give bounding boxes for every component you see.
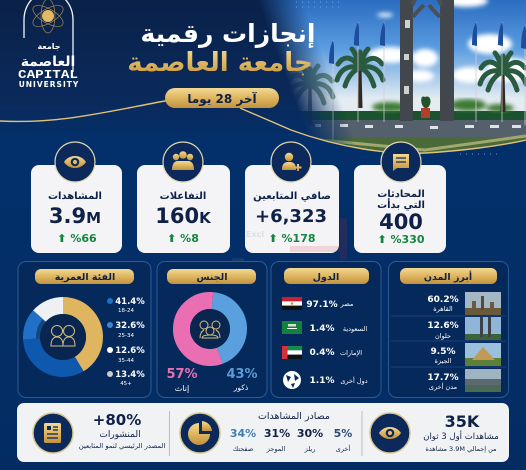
stat: posts: المصدر الرئيسي لنمو المتابعين — [79, 442, 165, 450]
row: Helwan: حلوان — [435, 332, 451, 340]
watermark: Excl — [246, 230, 264, 239]
stat card: views: المشاهدات — [48, 191, 102, 202]
icon: audience — [51, 326, 75, 346]
logo: Capital University: العاصمة — [21, 54, 75, 70]
row: UAE: 0.4% — [310, 348, 334, 358]
stat: view sources: أخرى — [336, 444, 350, 453]
row: other cities: 17.7% — [427, 373, 459, 383]
row: Helwan: 12.6% — [427, 321, 459, 331]
stat: posts: المنشورات — [99, 430, 141, 440]
title: جامعة العاصمة — [127, 48, 313, 78]
row: Giza: 9.5% — [431, 347, 455, 357]
stat card: interactions: ⬆ %8 — [167, 232, 199, 245]
legend: age groups: 25-34 — [118, 333, 134, 339]
logo: Capital University: CAPITAL — [18, 68, 78, 82]
stat: view sources: صفحتك — [233, 445, 254, 453]
legend: age groups: 32.6% — [115, 321, 145, 331]
row: other countries — [283, 371, 368, 389]
row: Giza — [431, 343, 501, 366]
legend: age groups: 18-24 — [118, 308, 134, 314]
heading: age groups: الفئة العمرية — [55, 272, 115, 283]
panel: gender: إناث — [175, 384, 189, 394]
legend: age groups: 13.4% — [115, 370, 145, 380]
row: Cairo: 60.2% — [427, 295, 459, 305]
stat card: net followers — [245, 142, 339, 253]
logo: Capital University — [18, 0, 79, 89]
panel: gender: ذكور — [233, 383, 248, 392]
row: Saudi Arabia: السعودية — [343, 325, 367, 333]
stat card: conversations — [354, 142, 446, 253]
row: Egypt — [282, 297, 353, 310]
period pill: آخر 28 يوما — [187, 91, 258, 107]
icon: people — [200, 321, 220, 338]
logo: Capital University: جامعة — [37, 42, 61, 51]
watermark — [232, 218, 347, 278]
row: other cities: مدن أخرى — [429, 382, 457, 391]
stat: 3-second views: مشاهدات أول 3 ثوان — [423, 430, 499, 442]
row: Egypt: مصر — [340, 300, 353, 308]
stat card: net followers: ⬆ %178 — [268, 232, 316, 245]
stat: 3-second views — [370, 412, 499, 453]
legend: age groups — [107, 297, 145, 387]
stat: view sources: ريلز — [304, 445, 315, 453]
stat card: conversations: 400 — [379, 210, 423, 234]
stat: view sources: 31% — [264, 427, 290, 440]
logo: Capital University: UNIVERSITY — [19, 80, 79, 89]
heading: gender: الجنس — [197, 272, 227, 283]
legend: age groups: 45+ — [120, 381, 132, 387]
stat: view sources — [180, 411, 352, 453]
stat card: net followers: صافي المتابعين — [253, 191, 331, 202]
stat: 3-second views: من إجمالي 3.9M مشاهدة — [425, 445, 497, 453]
panel: age groups — [18, 262, 151, 398]
stat card: conversations: ⬆ %330 — [377, 233, 425, 246]
chart: age donut — [32, 306, 94, 368]
row: Helwan — [427, 317, 501, 340]
title — [127, 19, 316, 78]
legend: age groups: 41.4% — [115, 297, 145, 307]
stat: view sources: 30% — [297, 427, 323, 440]
panel: gender — [157, 262, 267, 398]
stat: 3-second views: 35K — [445, 412, 480, 431]
stat card: conversations: التي بدأت — [377, 198, 425, 211]
panel: gender: 57% — [166, 367, 198, 382]
panel: summary strip — [17, 403, 509, 462]
row: Cairo — [427, 292, 501, 315]
stat: view sources: 5% — [334, 427, 352, 440]
row: Giza: الجيزة — [435, 357, 452, 365]
stat card: conversations: المحادثات — [377, 189, 425, 200]
stat card: interactions: التفاعلات — [160, 191, 206, 202]
chart: gender donut — [179, 298, 241, 360]
stat card: views: 3.9M — [49, 204, 101, 228]
panel: top cities — [388, 262, 508, 398]
legend: age groups: 12.6% — [115, 346, 145, 356]
stat: posts — [33, 411, 165, 453]
panel: countries — [271, 262, 381, 398]
stat card: net followers: +6,323 — [255, 206, 327, 227]
row: other cities — [427, 369, 501, 392]
stat: view sources: مصادر المشاهدات — [258, 411, 330, 422]
title: إنجازات رقمية — [140, 19, 316, 48]
period pill — [165, 88, 279, 108]
stat: view sources: 34% — [230, 427, 256, 440]
heading: countries: الدول — [313, 272, 339, 283]
stat card: interactions — [137, 142, 230, 253]
row: other countries: دول أخرى — [340, 376, 368, 385]
heading: top cities: أبرز المدن — [424, 270, 472, 283]
panel: gender: 43% — [226, 367, 258, 382]
decorative gold wave — [0, 100, 526, 153]
row: other countries: 1.1% — [310, 376, 334, 386]
stat card: interactions: 160K — [155, 204, 212, 228]
row: Cairo: القاهرة — [433, 305, 453, 313]
campus photo header — [250, 0, 526, 160]
row: Egypt: 97.1% — [306, 300, 338, 310]
stat: view sources: الموجز — [266, 445, 285, 453]
row: UAE: الإمارات — [340, 349, 362, 357]
row: Saudi Arabia — [282, 321, 367, 334]
row: Saudi Arabia: 1.4% — [310, 324, 334, 334]
stat: posts: +80% — [93, 411, 141, 429]
stat card: views: ⬆ %66 — [57, 232, 97, 245]
legend: age groups: 35-44 — [118, 358, 134, 364]
row: UAE — [282, 346, 362, 359]
stat card: views — [31, 142, 122, 253]
